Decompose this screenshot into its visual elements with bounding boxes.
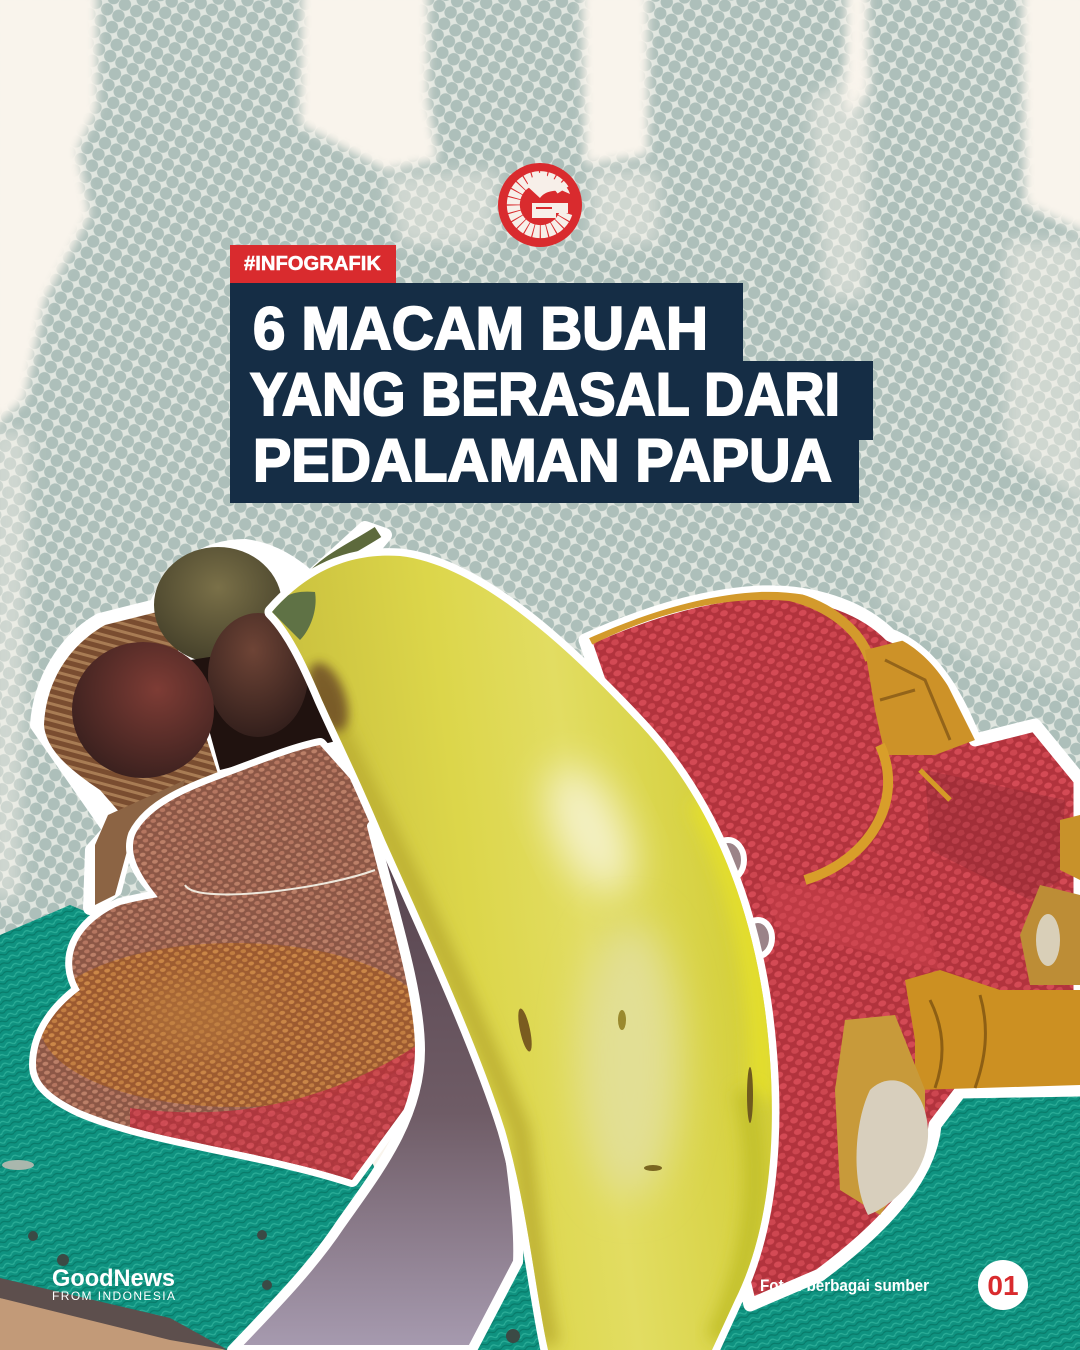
- fruit cutout: right red jackfruit: [585, 592, 1080, 1305]
- palm and wrist: [232, 823, 518, 1350]
- page number badge: 01: [987, 1270, 1019, 1301]
- fingers at right of banana: [712, 840, 772, 956]
- fruit cutout: hand holding banana: [232, 823, 772, 1350]
- white stump: [835, 1015, 925, 1215]
- tag: #INFOGRAFIK: [230, 245, 396, 283]
- logo: red circular emblem: [498, 163, 582, 247]
- yellow husk: top stem: [865, 640, 975, 755]
- tag: #INFOGRAFIK: #INFOGRAFIK: [244, 253, 382, 275]
- green table: [0, 905, 1080, 1350]
- yellow husk: top rim: [590, 595, 870, 660]
- fruit: green-brown: [154, 547, 282, 663]
- title block: [230, 283, 873, 503]
- yellow husk: right stems: [1020, 885, 1080, 985]
- emblem: central patterned bar: [532, 203, 568, 218]
- fruit cutout: basket of matoa fruits: [37, 528, 385, 908]
- back brown fruit: [133, 745, 395, 900]
- emblem: eagle head: [527, 172, 570, 198]
- dark shadow between fruits: [190, 640, 340, 770]
- title block: YANG BERASAL DARI: [250, 361, 840, 428]
- page number badge: [978, 1260, 1028, 1310]
- small bruises: [747, 1067, 753, 1123]
- background: halftone building texture: [0, 0, 1080, 960]
- stem: [308, 532, 378, 582]
- title block: PEDALAMAN PAPUA: [253, 427, 832, 494]
- fruit cutout: jackfruits on the left: [36, 745, 430, 1190]
- fruit: red-brown front: [72, 642, 214, 778]
- fruit cutout: giant yellow banana: [272, 556, 772, 1350]
- thin white string: [185, 870, 375, 894]
- white outline for both left fruits: [36, 745, 418, 1180]
- wooden table edge: [0, 1278, 228, 1350]
- dark shading: [925, 770, 1065, 900]
- title block: 6 MACAM BUAH: [253, 295, 708, 362]
- photo credit: Foto : berbagai sumber: [760, 1276, 929, 1295]
- brown bruise near stem: [306, 656, 355, 736]
- yellow husk: side curve: [805, 745, 888, 880]
- emblem: white G ring: [513, 178, 566, 232]
- brand: GoodNews from Indonesia: GoodNews: [52, 1265, 175, 1292]
- stem tip: [272, 592, 316, 640]
- front orange-red fruit: [36, 895, 415, 1180]
- fruit: dark right: [208, 613, 308, 737]
- brand: GoodNews from Indonesia: FROM INDONESIA: [52, 1289, 175, 1303]
- table spots: [2, 1160, 520, 1343]
